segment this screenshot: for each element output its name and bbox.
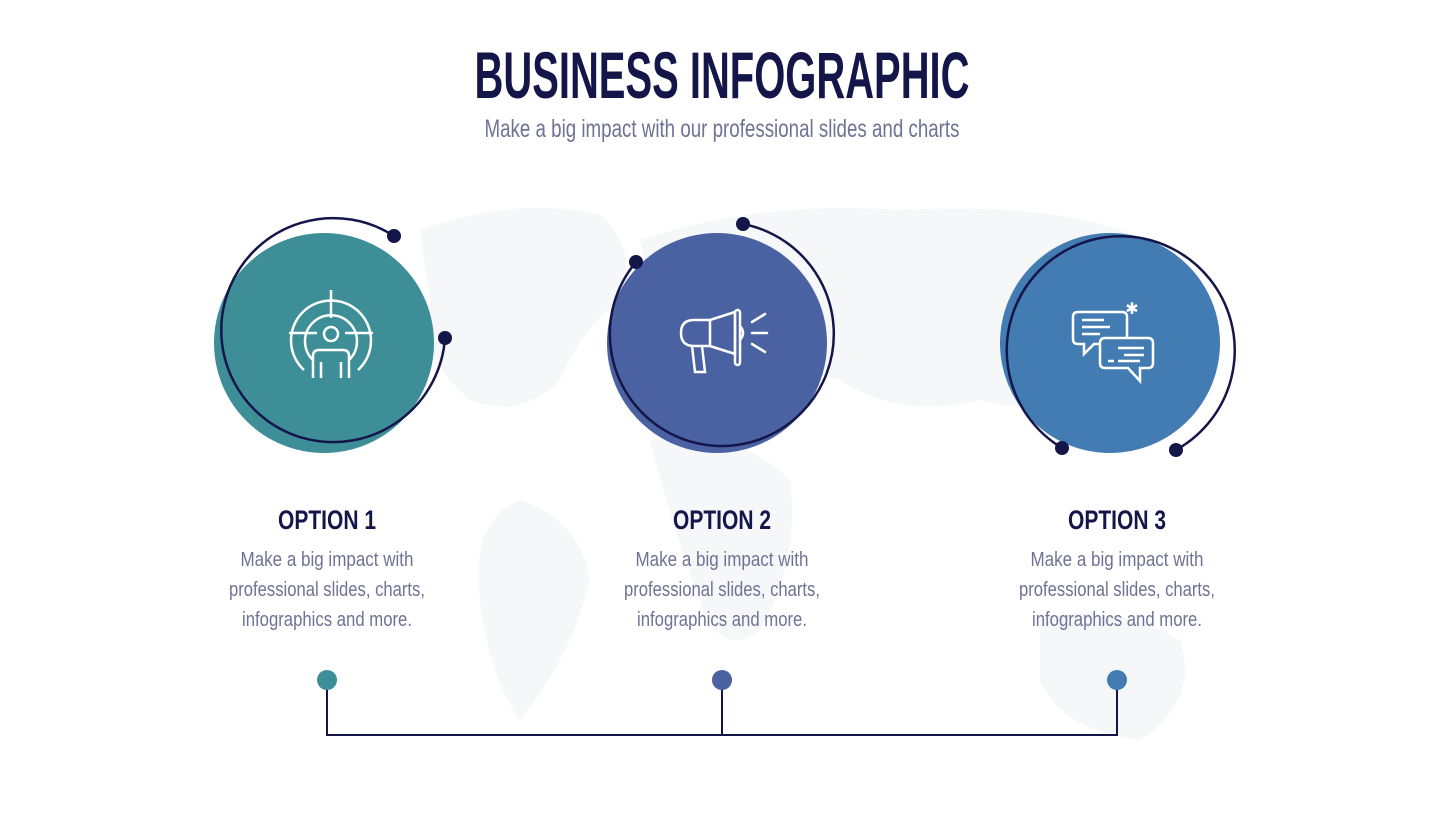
option 3 text: Make a big impact with bbox=[1030, 549, 1204, 571]
option 2 circle bbox=[607, 217, 834, 453]
icon: megaphone bbox=[681, 310, 767, 372]
option 2 text: professional slides, charts, bbox=[624, 579, 820, 601]
option 3 text bbox=[1019, 505, 1215, 631]
subtitle: Make a big impact with our professional slides and charts bbox=[484, 115, 960, 143]
option 2 text: infographics and more. bbox=[637, 609, 807, 631]
title: BUSINESS INFOGRAPHIC bbox=[474, 38, 970, 112]
option 1 circle bbox=[214, 218, 452, 453]
option 1 text: professional slides, charts, bbox=[229, 579, 425, 601]
option 1 text: Make a big impact with bbox=[240, 549, 414, 571]
option 3 text: OPTION 3 bbox=[1068, 505, 1166, 535]
option 2 text bbox=[624, 505, 820, 631]
option 2 text: Make a big impact with bbox=[636, 549, 808, 571]
option 1 text: OPTION 1 bbox=[278, 505, 376, 535]
connector timeline bbox=[317, 670, 1127, 735]
icon: chat bubbles: ✱ bbox=[1125, 301, 1139, 318]
option 3 text: infographics and more. bbox=[1032, 609, 1202, 631]
option 3 text: professional slides, charts, bbox=[1019, 579, 1215, 601]
icon: chat bubbles bbox=[1073, 301, 1153, 381]
background world map bbox=[420, 208, 1185, 740]
option 1 text: infographics and more. bbox=[242, 609, 412, 631]
option 1 text bbox=[229, 505, 425, 631]
option 3 circle bbox=[1000, 233, 1235, 457]
option 2 text: OPTION 2 bbox=[673, 505, 771, 535]
icon: target person bbox=[289, 290, 373, 378]
